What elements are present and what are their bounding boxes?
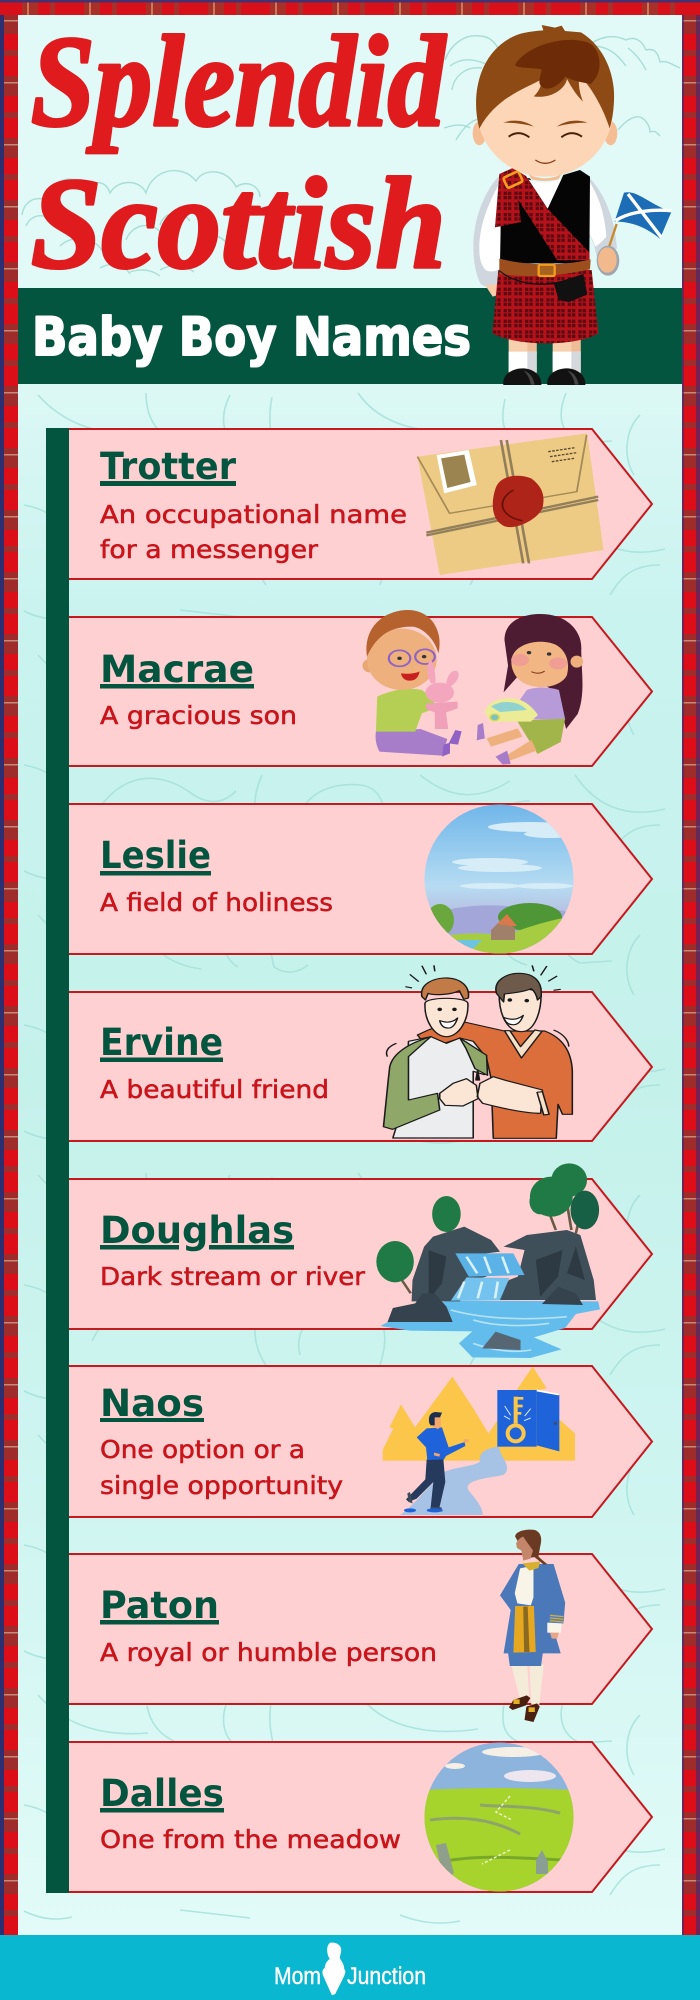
trees: [393, 1203, 580, 1293]
arrow: [69, 1179, 652, 1329]
boy: [363, 659, 377, 672]
hair: [476, 25, 614, 129]
meaning: One option or a: [100, 1435, 305, 1464]
panel: Paton: [69, 1530, 652, 1722]
panel: Ervine: [69, 965, 652, 1141]
meaning: One from the meadow: [100, 1825, 401, 1854]
icon: nobleman in blue coat: [500, 1530, 565, 1722]
right man head: [499, 988, 541, 1032]
name: Ervine: [100, 1021, 223, 1064]
left sleeve: [473, 177, 504, 287]
arrow: [69, 1366, 652, 1517]
icon: Scottish boy in kilt: [473, 25, 671, 385]
shoulder buckle: [503, 171, 523, 188]
patterned page background: [18, 384, 682, 1936]
coat: [500, 1564, 565, 1653]
meaning: An occupational name: [100, 500, 407, 529]
panel: Doughlas: [69, 1163, 652, 1358]
subtitle: Baby Boy Names: [32, 307, 471, 368]
panel: Leslie: [69, 804, 652, 954]
icon: meadow circle: [424, 1742, 574, 1894]
right sleeve: [586, 177, 617, 258]
logo figure: [323, 1943, 345, 1995]
small rocks: [388, 1293, 453, 1322]
panel: Naos: single opportunity: [100, 1471, 343, 1500]
wordmark: Mom: [274, 1963, 321, 1990]
title: [31, 10, 447, 296]
name: Naos: [100, 1382, 204, 1425]
panel: Trotter: [69, 429, 652, 579]
panel: Dalles: [69, 1742, 652, 1894]
head: [473, 121, 486, 145]
pouch: [499, 270, 587, 302]
icon: man walking to key door: [383, 1367, 575, 1515]
belt: [499, 259, 591, 276]
shoes: [503, 368, 541, 385]
path: [400, 1447, 507, 1515]
name: Leslie: [100, 834, 211, 877]
name: Doughlas: [100, 1209, 294, 1252]
brows: [503, 121, 534, 127]
cravat: [515, 1566, 533, 1605]
rabbit toy: [425, 683, 454, 703]
cuff: [549, 1614, 564, 1623]
mouth: [535, 160, 555, 163]
hand: [597, 246, 619, 276]
hands: [440, 1077, 542, 1113]
meaning: A gracious son: [100, 701, 297, 730]
key: [504, 1397, 531, 1441]
rocks: [412, 1227, 500, 1301]
head: [515, 1530, 541, 1558]
icon: countryside circle: [424, 804, 576, 954]
man: [406, 1459, 445, 1508]
meaning: Dark stream or river: [100, 1262, 366, 1291]
door: [497, 1390, 537, 1447]
decorative clouds: [22, 36, 680, 276]
name: Macrae: [100, 648, 254, 691]
icon: waterfall and rocks: [376, 1163, 600, 1358]
arrow: [69, 617, 652, 766]
waterfall: [455, 1253, 525, 1277]
left man head: [425, 998, 468, 1037]
meaning: A field of holiness: [100, 888, 333, 917]
sash: [495, 168, 589, 260]
name: Trotter: [100, 445, 237, 488]
arrow: [69, 1554, 652, 1704]
panel: Macrae: [69, 610, 652, 766]
stockings: [511, 1665, 544, 1705]
arrow: [69, 429, 652, 579]
title: Scottish: [31, 152, 446, 296]
legs: [509, 337, 537, 373]
kilt: [492, 270, 598, 343]
meaning: A beautiful friend: [100, 1075, 329, 1104]
header background: [18, 15, 682, 288]
left man body: [393, 1037, 487, 1138]
right man body: [417, 1021, 572, 1138]
shoes: [509, 1695, 530, 1710]
title: Splendid: [31, 10, 447, 154]
vest: [500, 170, 590, 263]
eyes: [509, 133, 529, 137]
water pool: [380, 1301, 600, 1358]
panel: vertical spine: [46, 428, 69, 1893]
name: Dalles: [100, 1772, 224, 1815]
panel: Trotter: for a messenger: [100, 535, 319, 564]
arrow: [69, 804, 652, 954]
breeches: [508, 1653, 543, 1666]
arrow: [69, 1742, 652, 1892]
meaning: A royal or humble person: [100, 1638, 437, 1667]
mountains: [383, 1367, 575, 1461]
icon: two children playing: [363, 610, 583, 765]
flag stick: [608, 224, 617, 250]
footer bar: [0, 1935, 700, 2000]
icon: sealed envelope: [417, 433, 604, 575]
flag: [615, 192, 671, 239]
panel: Naos: [69, 1366, 652, 1517]
arrow: [69, 992, 652, 1141]
rays: [405, 965, 561, 990]
green banner: [18, 288, 682, 384]
logo: MomJunction: Junction: [347, 1963, 426, 1990]
girl: [504, 614, 582, 729]
name: Paton: [100, 1584, 219, 1627]
toy car: [484, 698, 538, 722]
logo: MomJunction: [274, 1943, 426, 1995]
icon: two friends: [383, 965, 572, 1138]
